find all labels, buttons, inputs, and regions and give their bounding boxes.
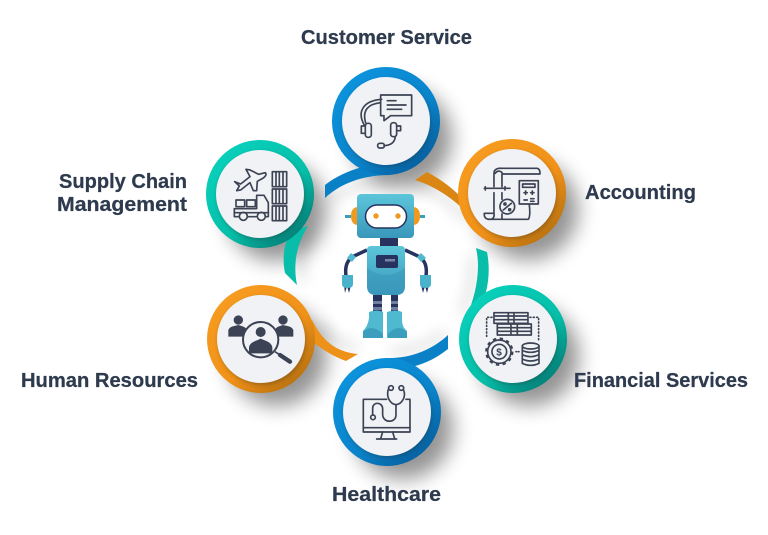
- robot arms: [346, 250, 426, 276]
- robot body: [367, 246, 405, 295]
- ribbon: teal right: [466, 248, 489, 318]
- robot face: [366, 205, 406, 228]
- icon: headset with speech bubble: [361, 95, 412, 148]
- icon: people under magnifier: [228, 315, 293, 362]
- label: customer service: Customer Service: [301, 26, 472, 49]
- node: customer service: [332, 67, 440, 175]
- label: supply chain management: [57, 170, 187, 216]
- node: accounting: [458, 139, 566, 247]
- node: healthcare: [333, 358, 441, 466]
- icon: document and calculator: [484, 168, 540, 219]
- label: supply chain management: Supply Chain: [59, 170, 187, 193]
- ribbon: orange top right: [415, 172, 470, 216]
- robot: [342, 194, 431, 338]
- robot chest panel: [376, 255, 398, 268]
- label: supply chain management: Management: [57, 193, 187, 216]
- robot antennas: [345, 215, 425, 218]
- icon: plane, truck, containers: [234, 169, 287, 221]
- ribbon: teal left: [284, 226, 308, 285]
- robot neck: [380, 237, 398, 247]
- robot claws: [344, 285, 429, 293]
- ribbon: orange bottom left: [305, 320, 358, 361]
- node: human resources: [207, 285, 315, 393]
- icon: banknotes, gear, coins: $: [496, 347, 502, 358]
- robot shoulders: [347, 253, 426, 262]
- label: financial services: Financial Services: [574, 369, 748, 392]
- robot eyes: [373, 213, 379, 219]
- robot hands: [342, 275, 431, 288]
- ribbon: blue bottom: [385, 335, 448, 368]
- label: human resources: Human Resources: [21, 369, 198, 392]
- robot legs: [373, 295, 398, 313]
- ribbon: blue top: [325, 165, 390, 198]
- drop shadows: [226, 88, 579, 479]
- robot head: [357, 194, 414, 238]
- label: accounting: Accounting: [585, 181, 696, 204]
- robot feet: [363, 310, 383, 338]
- robot ears: [351, 207, 420, 225]
- ribbon shadows: [302, 182, 473, 352]
- icon: monitor with stethoscope: [363, 386, 410, 439]
- node: financial services: [459, 285, 567, 393]
- label: healthcare: Healthcare: [332, 483, 441, 506]
- node: supply chain: [206, 140, 314, 248]
